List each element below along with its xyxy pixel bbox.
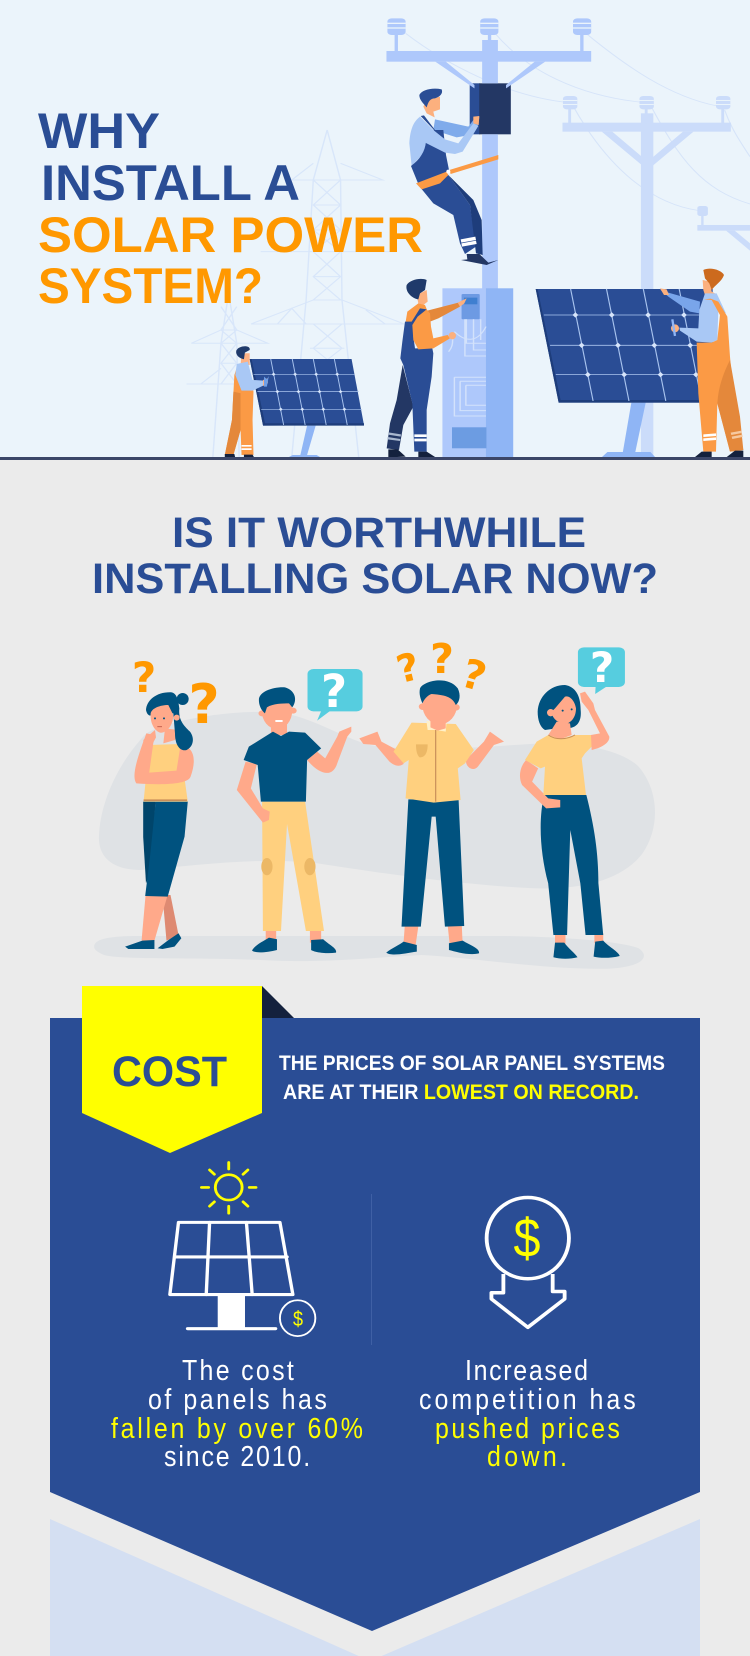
title line: solar power: SOLAR POWER: [38, 207, 423, 263]
illustration: pole junction box: [470, 83, 511, 134]
coin dollar: $: [514, 1207, 540, 1269]
person 2: man in navy shirt: [237, 669, 363, 953]
line 3: pushed prices: [435, 1412, 620, 1444]
statement line 2: ARE AT THEIR LOWEST ON RECORD.: [283, 1081, 639, 1104]
cost statement: [279, 1052, 665, 1104]
bubble question mark: ?: [321, 665, 347, 718]
line 1: The cost: [182, 1354, 294, 1386]
icon: coin outline: [280, 1300, 315, 1336]
heading line 1: IS IT WORTHWHILE: [172, 509, 586, 557]
column divider: [371, 1194, 372, 1345]
illustration: background pylons: [187, 130, 404, 457]
text: competition: [419, 1354, 636, 1472]
statement line 1: THE PRICES OF SOLAR PANEL SYSTEMS: [279, 1052, 665, 1075]
line 2: of panels has: [148, 1383, 327, 1415]
bubble question mark: ?: [590, 643, 614, 692]
title: [38, 103, 423, 314]
person 1 body: [125, 733, 194, 949]
illustration: main utility pole: [386, 18, 591, 294]
question mark: ?: [132, 653, 156, 702]
line 4: since 2010.: [164, 1440, 310, 1472]
question mark: ?: [430, 635, 454, 683]
illustration: electrical cabinet: [442, 288, 513, 457]
down arrow: [491, 1274, 565, 1327]
illustration: climbing worker: [409, 89, 498, 265]
panel: hero background: [0, 0, 750, 458]
illustration: solar scene infrastructure: [187, 18, 750, 458]
title line: why: WHY: [38, 103, 160, 159]
title line: system: SYSTEM?: [38, 258, 263, 314]
title line: install a: INSTALL A: [41, 155, 300, 211]
question marks and bubble marks: [132, 635, 614, 736]
illustration: small panel worker: [225, 346, 269, 458]
line 1: Increased: [465, 1354, 588, 1386]
icon: sun: [201, 1162, 256, 1213]
coin dollar sign: $: [293, 1308, 303, 1331]
line 4: down.: [487, 1440, 567, 1472]
illustration: panel worker right: [660, 269, 743, 458]
question mark: ?: [392, 644, 424, 692]
illustration: small solar panel: [250, 359, 364, 457]
ribbon fold: [262, 986, 294, 1018]
person 4 upper body: [525, 685, 609, 795]
question mark: ?: [456, 651, 491, 701]
ground line: [0, 457, 750, 460]
heading: is it worthwhile: [92, 509, 658, 603]
illustration: large solar panel: [536, 289, 713, 457]
illustration: confused people: [94, 635, 655, 969]
panel: faded next section: [50, 1519, 700, 1656]
person 1 head: [143, 692, 193, 750]
coin outline: [487, 1197, 569, 1279]
panel: question section background: [0, 460, 750, 1656]
icon: solar panel: [170, 1222, 293, 1329]
line 3: fallen by over 60%: [111, 1412, 363, 1444]
ground shadow: [94, 936, 644, 969]
background blob: [99, 712, 655, 888]
heading line 2: INSTALLING SOLAR NOW?: [92, 555, 658, 603]
person 4 lower body: [520, 647, 625, 959]
panel: cost: [50, 986, 700, 1631]
icon: solar panel with sun and dollar: [170, 1162, 315, 1336]
illustration: far utility pole: [562, 96, 750, 457]
cost tag: [82, 986, 262, 1153]
panel body: [50, 1018, 700, 1631]
text: cost of panels: [111, 1354, 363, 1472]
question mark: ?: [188, 673, 220, 736]
illustration: power lines: [406, 33, 750, 211]
illustration: cabinet worker: [387, 279, 467, 457]
cost label: COST: [112, 1048, 227, 1096]
person 3: man shrugging: [359, 680, 504, 955]
icon: dollar coin with down arrow: [487, 1197, 569, 1327]
line 2: competition has: [419, 1383, 636, 1415]
